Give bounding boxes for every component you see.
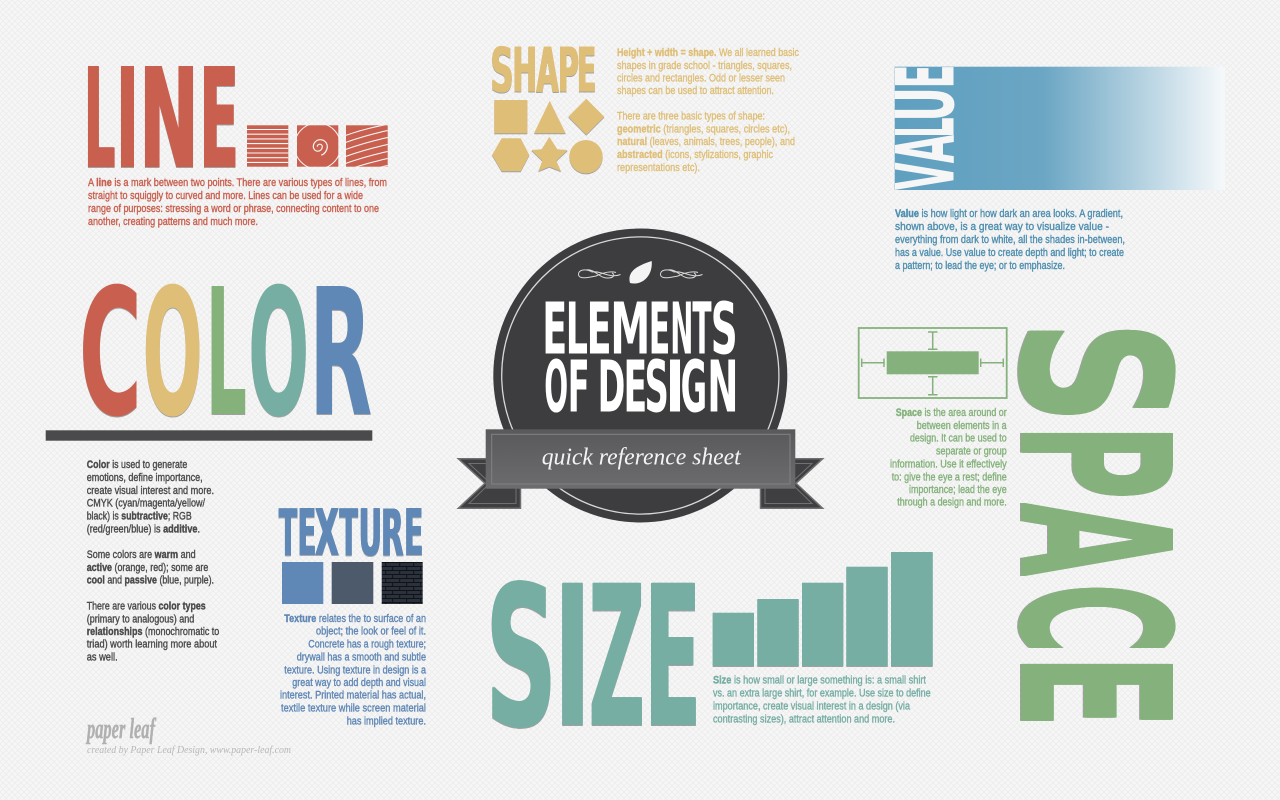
footer: credit [85,713,291,756]
heading: space: C [975,583,1211,654]
icon: curved lines [346,125,388,167]
body text: space: design. It can be used to [910,433,1007,445]
body text: shape: Height + width = shape. We all learned basic [617,47,799,59]
body text: color: triad) worth learning more about [87,639,217,651]
title: N [670,287,693,370]
title: S [644,346,669,429]
icon: leaf [629,261,652,284]
body text: shape: circles and rectangles. Odd or lesser seen [617,72,785,84]
gradient block [895,67,1225,190]
body text: texture: has implied texture. [347,715,426,727]
title: E [587,287,612,370]
body text: shape: shapes in grade school - triangles, squares, [617,60,792,72]
icon: straight lines [247,125,288,167]
heading: size: S [486,544,557,771]
heading: space: A [975,502,1211,576]
title: D [598,346,625,429]
panel: color [46,252,372,664]
heading: texture: T [340,496,358,571]
badge: elements of design [458,228,823,522]
bar chart: growing sizes [713,552,933,666]
body text: size: contrasting sizes), attract attention and more. [713,713,895,725]
panel: space [859,319,1211,729]
heading: color: L [206,252,247,456]
body text: size [713,675,931,725]
body text: shape: abstracted (icons, stylizations, graphic [617,149,773,161]
body text: size: Size is how small or large something is: a small shirt [713,675,926,687]
icons: basic shapes [492,99,604,173]
heading: shape: P [558,34,579,106]
heading: value: V [880,162,972,190]
title: M [610,287,650,370]
body text: size: vs. an extra large shirt, for example. Use size to define [713,688,931,700]
body text: value: Value is how light or how dark an area looks. A gradient, [895,208,1123,220]
body text: line: straight to squiggly to curved and more. Lines can be used for a wide [88,190,363,202]
ribbon right tail [760,459,823,508]
icon: left flourish [578,270,620,278]
body text: size: importance, create visual interest in a design (via [713,701,911,713]
body text: color: Some colors are warm and [87,549,196,561]
body text: value [895,208,1125,272]
underline bar [46,430,372,441]
heading: space: S [975,319,1211,426]
heading: texture: U [359,496,382,571]
body text: texture: texture. Using texture in design is a [284,664,427,676]
body text: color: active (orange, red); some are [87,562,208,574]
panel: texture [279,496,427,727]
body text: shape: natural (leaves, animals, trees, people), and [617,136,795,148]
heading: size: I [554,544,591,771]
body text: line [88,177,387,228]
title: E [649,287,670,370]
body text: space: importance; lead the eye [909,484,1007,496]
text: E [405,496,424,571]
text: R [309,252,372,456]
swatches: texture [282,562,423,604]
heading: line: I [117,38,138,200]
body text: color: emotions, define importance, [87,472,203,484]
body text: texture: object; the look or feel of it. [316,626,426,638]
heading: value: A [880,135,972,163]
heading: line: N [140,38,198,200]
heading: shape: H [513,34,538,106]
title: F [568,346,590,429]
body text: color: cool and passive (blue, purple). [87,575,214,587]
body text: space [890,407,1007,509]
body text: color: CMYK (cyan/magenta/yellow/ [87,498,206,510]
body text: space: separate or group [936,446,1007,458]
title: G [681,346,707,429]
body text: space: Space is the area around or [896,407,1007,419]
body text: value: shown above, is a great way to visualize value - [895,221,1109,233]
body text: texture: interest. Printed material has actual, [280,690,426,702]
ribbon text: quick reference sheet [542,444,742,470]
body text: line: another, creating patterns and much more. [88,216,258,228]
panel: shape: E [577,34,597,106]
panel: value [880,65,1225,272]
panel: line: E [200,38,239,200]
body text: shape: shapes can be used to attract attention. [617,85,774,97]
heading: size: Z [589,544,644,771]
heading: texture: X [316,496,339,571]
body text: color: (primary to analogous) and [87,613,194,625]
body text: space: between elements in a [917,420,1007,432]
heading: space: P [975,423,1211,500]
icon: right flourish [660,270,702,278]
panel: line [88,66,388,228]
title: I [665,346,685,429]
title: T [692,287,712,370]
space diagram [859,328,1007,398]
title: L [566,287,588,370]
body text: shape: geometric (triangles, squares, circles etc), [617,124,790,136]
body text: space: through a design and more. [897,497,1007,509]
heading: texture: T [279,496,298,571]
body text: value: has a value. Use value to create depth and light; to create [895,247,1124,259]
body text: color: as well. [87,652,118,664]
icon: spiral line [295,123,341,169]
body text: value: everything from dark to white, all the shades in-between, [895,234,1125,246]
logo: paper leaf: paper leaf [85,713,157,745]
body text: shape [617,47,799,174]
body text: space: to: give the eye a rest; define [892,471,1007,483]
title: E [542,287,567,370]
badge circle [493,228,787,522]
panel: shape [491,34,799,174]
heading: line: L [85,38,115,200]
heading: color: O [142,252,203,456]
body text: color: relationships (monochromatic to [87,626,219,638]
body text: color: There are various color types [87,600,206,612]
panel: size [486,544,933,771]
body text: texture: drywall has a smooth and subtle [297,651,426,663]
body text: shape: representations etc). [617,162,700,174]
body text: color: (red/green/blue) is additive. [87,524,200,536]
body text: line: A line is a mark between two points. There are various types of lines, from [88,177,387,189]
heading: color: O [248,252,309,456]
title: N [707,346,738,429]
body text: color: Color is used to generate [87,459,187,471]
heading: value: L [880,117,972,138]
body text: line: range of purposes: stressing a word or phrase, connecting content to one [88,203,379,215]
body text: shape: There are three basic types of shape: [617,110,765,122]
title: O [544,346,568,429]
credit line: created by Paper Leaf Design, www.paper-leaf.com [87,744,291,756]
heading: texture: R [382,496,404,571]
body text: space: information. Use it effectively [890,458,1007,470]
title [542,287,738,429]
badge inner ring [502,237,779,514]
heading: value: U [880,87,972,122]
body text: texture: textile texture while screen material [281,703,426,715]
ribbon left tail [458,459,520,508]
body text: color: create visual interest and more. [87,485,214,497]
body text: color [87,459,219,664]
heading: shape: A [537,34,559,106]
body text: texture [280,613,427,727]
body text: texture: Concrete has a rough texture; [308,638,426,650]
body text: color: black) is subtractive; RGB [87,511,192,523]
heading: texture: E [298,496,317,571]
panel: size: E [644,544,701,771]
heading: shape: S [491,34,514,106]
ribbon band [486,429,795,489]
heading: space: E [975,654,1211,729]
heading: color: C [79,252,142,456]
text: E [880,65,972,88]
body text: texture: great way to add depth and visual [292,677,426,689]
body text: texture: Texture relates the to surface of an [284,613,426,625]
body text: value: a pattern; to lead the eye; or to emphasize. [895,260,1065,272]
title: E [624,346,647,429]
title: S [711,287,738,370]
